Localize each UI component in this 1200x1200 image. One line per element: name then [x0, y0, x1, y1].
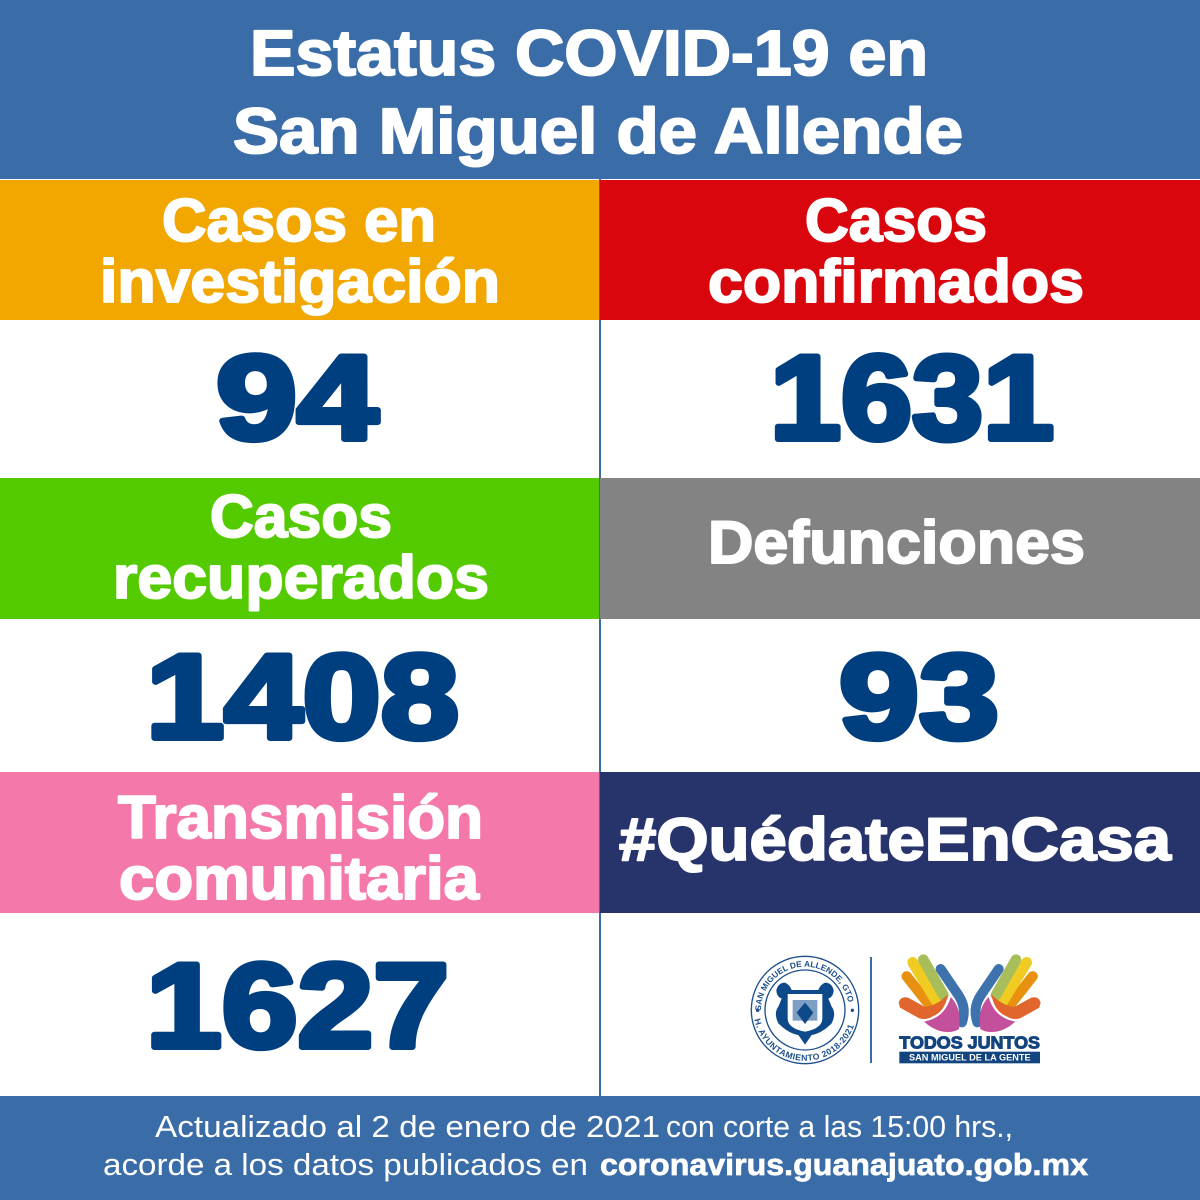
panel: defunciones: Defunciones [708, 509, 1085, 576]
center divider [599, 179, 601, 1096]
panel: casos confirmados [600, 180, 1200, 320]
panel: transmisión comunitaria: Transmisión [118, 784, 483, 851]
icon: municipal seal: SAN MIGUEL DE ALLENDE, GTO [755, 961, 854, 1010]
logo wordmark: SAN MIGUEL DE LA GENTE [909, 1053, 1031, 1063]
footer: con corte a las 15:00 hrs., [666, 1109, 1013, 1144]
icon: todos juntos hands [899, 960, 1041, 1032]
number: defunciones: 93 [839, 630, 999, 764]
divider [870, 957, 872, 1063]
number: confirmados: 1631 [770, 331, 1054, 465]
panel: casos en investigación [0, 180, 599, 320]
title banner: Estatus COVID-19 en [250, 17, 928, 89]
number: transmisión comunitaria: 1627 [146, 939, 449, 1073]
panel: casos confirmados: confirmados [708, 248, 1084, 315]
panel: transmisión comunitaria [0, 772, 599, 913]
panel: casos confirmados: Casos [805, 187, 987, 254]
logo wordmark: TODOS JUNTOS [899, 1032, 1040, 1052]
panel: casos recuperados: recuperados [113, 544, 489, 611]
panel: casos en investigación: Casos en [162, 187, 436, 254]
number: investigación: 94 [216, 331, 378, 465]
panel: casos recuperados [0, 478, 599, 619]
right hand [976, 960, 1041, 1032]
panel: transmisión comunitaria: comunitaria [119, 845, 480, 912]
logos [750, 954, 1041, 1064]
footer: acorde a los datos publicados en [103, 1147, 588, 1182]
panel: casos en investigación: investigación [100, 248, 500, 315]
footer: Actualizado al 2 de enero de 2021 [155, 1109, 660, 1144]
panel: hashtag: #QuédateEnCasa [619, 806, 1172, 873]
panel: casos recuperados: Casos [210, 483, 392, 550]
footer [0, 1096, 1200, 1200]
icon: municipal seal [750, 956, 860, 1064]
footer: coronavirus.guanajuato.gob.mx [600, 1147, 1089, 1182]
number: recuperados: 1408 [146, 630, 459, 764]
title banner: San Miguel de Allende [233, 95, 963, 167]
panel: hashtag [600, 772, 1200, 913]
icon: municipal seal: H. AYUNTAMIENTO 2018-2021 [754, 1018, 854, 1061]
logo wordmark [899, 1032, 1040, 1063]
panel: defunciones [600, 478, 1200, 619]
title banner [0, 0, 1200, 179]
left hand [899, 960, 964, 1032]
